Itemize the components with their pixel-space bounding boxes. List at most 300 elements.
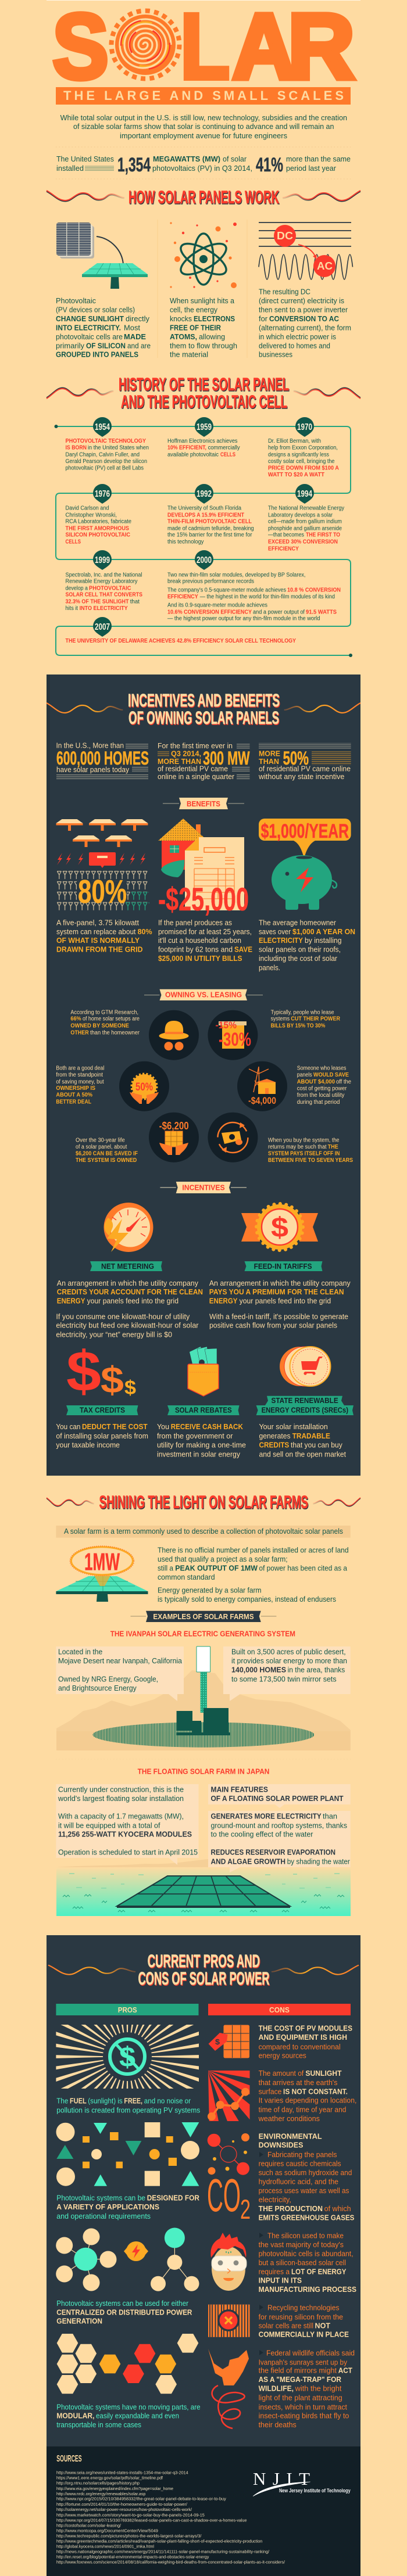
label: SRECs — [256, 1396, 354, 1415]
icon: tax credits dollars: $ — [124, 1377, 136, 1399]
callout: Ivanpah location: Located in the — [58, 1647, 102, 1656]
text: DC to AC: The resulting DC — [259, 287, 310, 296]
icon: CO2 molecule: 2 — [240, 2194, 251, 2225]
text: silicon energy input: the vast majority of today's — [259, 2240, 344, 2249]
text: environmental downsides: electricity, — [259, 2195, 291, 2204]
text: sunlight knocks electrons: allowing — [199, 332, 225, 341]
text: modular: transportable in some cases — [56, 2420, 141, 2429]
intro text: of sizable solar farms show that solar is continuing to advance and will remain an — [73, 122, 334, 131]
year pins: 1970 — [297, 422, 312, 432]
text: solar rebates: from the government or — [157, 1431, 233, 1440]
logo: NJIT — [253, 2469, 351, 2496]
text: benefit $1,000 a year — [259, 918, 355, 972]
timeline — [55, 417, 352, 657]
text: 1MW standard: common standard — [158, 1573, 215, 1581]
text: benefit $25,000: footprint by 62 tons and — [158, 945, 233, 953]
text: SRECs: TRADABLE — [292, 1431, 330, 1440]
text: DC to AC: in which electric power is — [259, 332, 336, 341]
heading: history: HISTORY OF THE SOLAR PANEL — [119, 374, 289, 394]
stat: more than 50%: without any state incentive — [258, 772, 344, 781]
stat: 300 MW: Q3 2014, — [171, 749, 201, 758]
callout: floating farm details — [56, 1784, 199, 1865]
text: benefit $25,000: If the panel produces as — [158, 918, 232, 927]
text: photovoltaic cells: directly — [126, 314, 150, 323]
text: 1MW standard: still a — [158, 1563, 174, 1572]
text: ownership 50% better: OWNERSHIP IS — [56, 1085, 95, 1092]
entry 1976 — [65, 505, 132, 546]
text: mega-trap: ACT — [338, 2366, 352, 2375]
entry 1970: PRICE DOWN FROM $100 A — [268, 465, 339, 472]
text: 66% owned by someone other: of home solar setups are — [83, 1016, 140, 1022]
text: feed-in tariffs: ENERGY — [209, 1296, 238, 1305]
source list: http://www.nrdc.org/energy/renewables/solar.asp — [56, 2491, 145, 2496]
year pins: 2000 — [197, 555, 212, 565]
callout: main features — [208, 1784, 351, 1808]
entry 1954: IS BORN — [65, 445, 87, 451]
entry 1999: PHOTOVOLTAIC — [89, 585, 131, 591]
text: photovoltaic cells: (PV devices or solar cells) — [56, 305, 135, 314]
text: net metering: An arrangement in which the utility company — [57, 1279, 199, 1287]
text: free fuel: The — [56, 2097, 68, 2105]
icon: tax credits dollars — [66, 1339, 136, 1403]
text: DC to AC — [259, 287, 351, 359]
callout: floating plant benefits — [208, 1811, 351, 1872]
text: benefit $1,000 a year: by installing — [305, 936, 342, 945]
label: net metering — [90, 1261, 162, 1271]
entry 1994: The National Renewable Energy — [268, 505, 344, 512]
stat: US solar installed: period last year — [286, 164, 337, 173]
entry 1999: Renewable Energy Laboratory — [65, 579, 138, 585]
icon: house and utility bill — [158, 819, 249, 917]
heading: Ivanpah: THE IVANPAH SOLAR ELECTRIC GENERATING SYSTEM — [110, 1630, 295, 1638]
text: recycling: solar cells are still — [259, 2321, 313, 2330]
heading: how solar panels work — [47, 186, 360, 207]
text: ownership 50% better: of saving money, but — [56, 1079, 104, 1085]
text: benefit $25,000: it'll cut a household carbon — [158, 936, 241, 945]
heading: floating solar farm: THE FLOATING SOLAR FARM IN JAPAN — [138, 1767, 269, 1775]
source list: http://www.greentechmedia.com/articles/read/ivanpah-solar-plant-falling-short-of-expected-electricity-production — [56, 2538, 262, 2543]
ribbon: owning vs leasing — [144, 989, 263, 1000]
source list: http://www.marketwatch.com/story/want-to-go-solar-buy-the-panels-2014-09-15 — [56, 2512, 205, 2517]
stat: US solar installed: MEGAWATTS (MW) — [153, 155, 220, 163]
text: solar rebates: RECEIVE CASH BACK — [171, 1422, 244, 1431]
source list: http://costofsolar.com/solar-leasing/ — [56, 2523, 122, 2528]
entry 1992: DEVELOPS A 15.9% EFFICIENT — [167, 512, 244, 518]
entry 1994: phosphide and gallium arsenide — [268, 525, 342, 532]
band: solar farm definition: A solar farm is a term commonly used to describe a collection of photovoltaic solar panels — [64, 1527, 343, 1535]
icon: panel with price tag — [208, 2025, 249, 2058]
intro text: important employment avenue for future engineers — [120, 131, 287, 140]
text: 66% owned by someone other: OWNED BY SOMEONE — [70, 1022, 129, 1029]
text: silicon energy input: but a silicon-based solar cell — [259, 2258, 346, 2267]
text: feed-in tariffs — [209, 1279, 351, 1330]
text: sunlight knocks electrons: them to flow through — [170, 342, 237, 350]
icon: solar cells to panel — [56, 223, 148, 289]
text: benefit 80% — [56, 918, 152, 953]
text: system pays itself off: BETWEEN FIVE TO SEVEN YEARS — [268, 1157, 353, 1164]
illustration: Ivanpah tower and mirror field — [56, 1646, 351, 1750]
text: mega-trap: Ivanpah's sunrays sent up by — [259, 2358, 348, 2367]
text: variety of applications: A VARIETY OF APPLICATIONS — [56, 2202, 159, 2211]
text: silicon energy input: The silicon used to make — [267, 2231, 344, 2240]
text: feed-in tariffs: positive cash flow from your solar panels — [209, 1321, 337, 1330]
text: net metering: electricity but feed one kilowatt-hour of solar — [56, 1321, 199, 1330]
heading: incentives and benefits: INCENTIVES AND BENEFITS — [128, 690, 280, 711]
text: environmental downsides: Fabricating the panels — [267, 2150, 337, 2159]
entry 2007: THE UNIVERSITY OF DELAWARE ACHIEVES 42.8% EFFICIENCY SOLAR CELL TECHNOLOGY — [65, 638, 296, 644]
text: DC to AC: businesses — [259, 350, 292, 359]
year pins: 1976 — [95, 489, 110, 499]
text: modular — [56, 2402, 201, 2429]
entry 1994: Laboratory develops a solar — [268, 512, 333, 518]
text: feed-in tariffs: PAYS YOU A PREMIUM FOR THE CLEAN — [209, 1287, 344, 1296]
text: system pays itself off: SYSTEM PAYS ITSELF OFF IN — [268, 1150, 340, 1157]
icon: receipt: -30% — [219, 1029, 251, 1050]
text: net metering — [56, 1279, 203, 1339]
text: modular: Photovoltaic systems have no moving parts, are — [56, 2402, 201, 2411]
year pins: 1959 — [197, 422, 212, 432]
text: leasing cuts power bills — [271, 1010, 340, 1029]
text: environmental downsides: THE PRODUCTION — [259, 2204, 323, 2213]
band: solar farm definition — [56, 1526, 351, 1538]
heading: history — [47, 374, 360, 412]
label: tax credits — [66, 1405, 138, 1415]
label: feed-in tariffs: FEED-IN TARIFFS — [254, 1262, 312, 1271]
icon: DC to AC conversion: AC — [317, 260, 333, 272]
text: net metering: If you consume one kilowatt-hour of utility — [56, 1312, 190, 1321]
text: mega-trap: their deaths — [259, 2420, 297, 2429]
text: photovoltaic cells: OF SILICON — [86, 342, 126, 350]
label: SRECs: STATE RENEWABLE — [271, 1396, 338, 1405]
stat: US solar installed: 1,354 — [117, 154, 151, 176]
text: leasing saves $4,000: ABOUT $4,000 — [297, 1079, 335, 1085]
icon: free sunlight burst: $ — [119, 2042, 135, 2073]
text: benefit 80%: DRAWN FROM THE GRID — [56, 945, 143, 953]
text: 66% owned by someone other — [70, 1010, 140, 1036]
text: feed-in tariffs: your panels feed into the grid — [240, 1296, 331, 1305]
entry 2000: — the highest in the world for thin-film modules of its kind — [200, 594, 335, 600]
text: benefit $1,000 a year: solar panels on their roofs, — [259, 945, 341, 953]
text: environmental downsides: process uses water as well as — [259, 2186, 349, 2195]
entry 1976: THE FIRST AMORPHOUS — [65, 525, 129, 532]
text: feed-in tariffs: An arrangement in which the utility company — [209, 1279, 351, 1287]
stat: 300 MW: 300 MW — [203, 748, 250, 769]
text: cost of modules: THE COST OF PV MODULES — [259, 2024, 352, 2032]
text: photovoltaic cells: Most — [124, 323, 140, 332]
text: cost of modules: energy sources — [259, 2051, 306, 2060]
text: DC to AC: for — [259, 314, 268, 323]
source list: http://global.kyocera.com/news/2014/0901_imka.html — [56, 2543, 154, 2549]
text: photovoltaic cells: and are — [127, 342, 151, 350]
icon: centralized and distributed networks — [56, 2227, 199, 2291]
text: DC to AC: (alternating current), the form — [259, 323, 351, 332]
callout: Ivanpah size: to some 173,500 twin mirror sets — [231, 1674, 337, 1683]
text: recycling: for reusing silicon from the — [259, 2312, 343, 2321]
text: photovoltaic cells: GROUPED INTO PANELS — [56, 350, 138, 359]
callout: Ivanpah size: Built on 3,500 acres of public desert, — [231, 1647, 346, 1656]
entry 1954 — [65, 438, 149, 472]
entry 2000: And its 0.9-square-meter module achieves — [167, 602, 267, 609]
text: centralized or distributed: Photovoltaic systems can be used for either — [56, 2299, 189, 2308]
entry 1994: —that becomes — [268, 532, 304, 539]
entry 1999: 32.3% OF THE SUNLIGHT — [65, 598, 129, 605]
text: variety of applications: DESIGNED FOR — [147, 2193, 199, 2202]
entry 1994: cell—made from gallium indium — [268, 519, 342, 525]
text: system pays itself off: When you buy the system, the — [268, 1137, 340, 1143]
text: environmental downsides: hydrofluoric acid, and the — [259, 2177, 338, 2186]
text: free fuel: FUEL — [70, 2097, 87, 2105]
text: mega-trap: Federal wildlife officials said — [266, 2348, 355, 2357]
text: DC to AC: then sent to a power inverter — [259, 305, 348, 314]
text: benefit $1,000 a year: ELECTRICITY — [259, 936, 303, 945]
stat: US solar installed: installed — [56, 164, 84, 173]
text: mega-trap: the field of mirrors might — [259, 2366, 337, 2375]
text: net metering: ENERGY — [57, 1296, 85, 1305]
entry 1976: Christopher Wronski, — [65, 512, 117, 518]
entry 2000: 10.6% CONVERSION EFFICIENCY — [167, 609, 252, 615]
stat: 300 MW: MORE THAN — [158, 757, 201, 766]
entry 1970: Dr. Elliot Berman, with — [268, 438, 321, 444]
entry 2000: 10.8 % CONVERSION — [287, 587, 341, 593]
text: benefit $1,000 a year: $1,000 A YEAR ON — [292, 927, 355, 936]
text: mega-trap: light of the plant attracting — [259, 2394, 342, 2402]
entry 1999: Spectrolab, Inc. and the National — [65, 572, 142, 578]
text: variety of applications: and operational requirements — [56, 2212, 151, 2220]
entry 2000: The company's 0.5-square-meter module achieves — [167, 587, 286, 593]
stat: more than 50%: 50% — [283, 748, 309, 769]
text: centralized or distributed: CENTRALIZED OR DISTRIBUTED POWER — [56, 2308, 192, 2316]
stat: 600,000 homes — [56, 741, 149, 780]
text: DC to AC: delivered to homes and — [259, 342, 330, 350]
stat: more than 50%: MORE — [259, 749, 280, 758]
entry 1959 — [167, 438, 240, 458]
icon: receipt — [208, 1010, 258, 1060]
callout: floating plant benefits: ground-mount and rooftop systems, thanks — [210, 1821, 347, 1829]
text: benefit 80%: 80% — [138, 927, 152, 936]
text: benefit $25,000 — [158, 918, 252, 963]
icon: modular hexagons — [57, 2334, 198, 2394]
callout: Ivanpah size — [223, 1646, 351, 1701]
text: 1MW standard: There is no official number of panels installed or acres of land — [158, 1545, 349, 1554]
text: mega-trap: insects, which in turn attract — [259, 2402, 347, 2411]
text: SRECs: generates — [259, 1431, 291, 1440]
source list: http://news.nationalgeographic.com/news/energy/2014/11/141111-solar-panel-manufacturing-sustainability-ranking/ — [56, 2549, 270, 2554]
icon: receipt: -15% — [215, 1020, 237, 1031]
text: sunlight not constant: that arrives at the earth's — [259, 2078, 337, 2087]
entry 1970 — [268, 438, 339, 478]
text: free fuel: and no noise or — [144, 2097, 191, 2105]
entry 1994: THE FIRST TO — [306, 532, 340, 539]
entry 1954: Daryl Chapin, Calvin Fuller, and — [65, 452, 140, 458]
text: 1MW standard — [158, 1545, 349, 1603]
text: photovoltaic cells: primarily — [56, 342, 85, 350]
entry 1999: hits it — [65, 605, 78, 612]
callout: main features: MAIN FEATURES — [210, 1785, 268, 1793]
panel: incentives and benefits — [47, 675, 360, 1476]
text: environmental downsides: ENVIRONMENTAL — [259, 2132, 322, 2141]
text: environmental downsides: of which — [324, 2204, 351, 2213]
text: sunlight not constant: It varies depending on location, — [259, 2096, 356, 2105]
text: ownership 50% better: Both are a good deal — [56, 1065, 104, 1071]
stat: 600,000 homes: In the U.S., More than — [56, 741, 124, 750]
heading: pros and cons — [48, 1950, 359, 1989]
label: solar rebates: SOLAR REBATES — [175, 1406, 232, 1414]
text: tax credits: of installing solar panels from — [56, 1431, 148, 1440]
text: mega-trap: AS A "MEGA-TRAP" FOR — [259, 2375, 341, 2384]
text: sunlight knocks electrons: cell, the energy — [170, 305, 218, 314]
text: 66% owned by someone other: 66% — [70, 1016, 81, 1022]
logo: NJIT: NJIT — [253, 2469, 310, 2489]
text: silicon energy input: photovoltaic cells is abundant, — [259, 2249, 354, 2258]
entry 2000 — [167, 572, 341, 622]
ribbon: incentives: INCENTIVES — [182, 1183, 225, 1192]
source list: http://solarenergy.net/solar-power-resources/how-photovoltaic-cells-work/ — [56, 2507, 192, 2512]
text: free fuel: (sunlight) is — [88, 2097, 123, 2105]
icon: free sunlight burst — [56, 2025, 199, 2089]
text: recycling — [259, 2304, 349, 2338]
text: sunlight knocks electrons: the material — [170, 350, 208, 359]
text: 66% owned by someone other: According to GTM Research, — [70, 1010, 138, 1016]
heading: incentives and benefits — [47, 690, 360, 728]
text: mega-trap — [259, 2348, 355, 2429]
text: 1MW standard: is typically sold to energy companies, instead of endusers — [158, 1595, 336, 1603]
callout: floating plant benefits: REDUCES RESERVOIR EVAPORATION — [210, 1848, 335, 1857]
entry 1976: SILICON PHOTOVOLTAIC — [65, 532, 130, 539]
source list: http://www.seia.org/news/united-states-installs-1354-mw-solar-q3-2014 — [56, 2470, 188, 2475]
icon: money cycle arrows — [208, 1113, 258, 1163]
callout: Ivanpah size: 140,000 HOMES — [231, 1666, 286, 1674]
text: sunlight knocks electrons: ELECTRONS — [194, 314, 235, 323]
text: environmental downsides: DOWNSIDES — [259, 2141, 304, 2150]
text: environmental downsides: EMITS GREENHOUSE GASES — [259, 2213, 355, 2222]
entry 1999: INTO ELECTRICITY — [80, 605, 128, 612]
entry 1959: 10% EFFICIENT, — [167, 445, 206, 451]
text: photovoltaic cells: INTO ELECTRICITY. — [56, 323, 121, 332]
text: sunlight not constant: The amount of — [259, 2069, 304, 2078]
text: sunlight not constant: weather conditions — [258, 2114, 320, 2123]
label: net metering: NET METERING — [101, 1262, 154, 1271]
entry 1954: photovoltaic (PV) cell at Bell Labs — [65, 465, 144, 472]
text: SRECs — [259, 1422, 346, 1458]
bar: cons — [208, 2004, 351, 2015]
entry 1959: commercially — [208, 445, 240, 451]
callout: floating plant benefits: by shading the water — [287, 1857, 350, 1865]
text: mega-trap: WILDLIFE, — [259, 2384, 294, 2393]
text: benefit $1,000 a year: panels. — [259, 963, 280, 972]
entry 1994: EXCEED 30% CONVERSION — [268, 539, 338, 546]
text: ownership 50% better: from the standpoint — [56, 1072, 103, 1078]
text: $6,200 saved: $6,200 CAN BE SAVED IF — [76, 1150, 138, 1157]
text: DC to AC: (direct current) electricity is — [259, 296, 344, 305]
entry 1959: Hoffman Electronics achieves — [167, 438, 238, 444]
heading: pros and cons: CONS OF SOLAR POWER — [138, 1968, 270, 1989]
intro text: While total solar output in the U.S. is still low, new technology, subsidies and the creation — [60, 113, 347, 122]
stat: 300 MW — [158, 741, 250, 781]
icon: utility tower and house — [237, 1061, 287, 1111]
icon: $1,000 per year piggy bank: $1,000/YEAR — [261, 820, 349, 842]
source list: http://fortune.com/2014/01/10/the-homeowners-guide-to-solar-power/ — [56, 2502, 188, 2507]
source list — [56, 2470, 285, 2565]
text: variety of applications — [56, 2193, 199, 2220]
text: solar rebates: investment in solar energy — [157, 1450, 241, 1458]
icon: atom — [170, 222, 237, 288]
year pins: 1992 — [197, 489, 212, 499]
year pins: 1999 — [95, 555, 110, 565]
entry 1954: Gerald Pearson develop the silicon — [65, 458, 147, 465]
ribbon: benefits — [163, 798, 244, 809]
text: sunlight knocks electrons: When sunlight hits a — [170, 296, 235, 305]
text: silicon energy input: requires a — [259, 2268, 290, 2276]
source list: http://www.npr.org/2014/07/15/330769382/leased-solar-panels-can-cast-a-shadow-over-a-homes-value — [56, 2517, 247, 2523]
entry 2000: EFFICIENCY — [167, 594, 198, 600]
source list: http://www.npr.org/2015/02/10/384958332/the-great-solar-panel-debate-to-lease-or-to-buy — [56, 2496, 226, 2502]
heading: incentives and benefits: OF OWNING SOLAR PANELS — [128, 707, 279, 728]
text: SRECs: that you can buy — [291, 1441, 342, 1450]
heading: how solar panels work: HOW SOLAR PANELS WORK — [128, 186, 279, 207]
text: 1MW standard: used that qualify a project as a solar farm; — [158, 1555, 288, 1563]
text: leasing saves $4,000 — [297, 1065, 352, 1106]
text: silicon energy input: MANUFACTURING PROCESS — [259, 2285, 356, 2294]
entry 2000: 91.5 WATTS — [306, 609, 337, 615]
text: solar rebates: utility for making a one-time — [157, 1441, 246, 1450]
stat: US solar installed: The United States — [56, 155, 114, 163]
text: tax credits: You can — [56, 1422, 80, 1431]
callout: floating farm details: 11,256 255-WATT KYOCERA MODULES — [58, 1830, 192, 1839]
icon: tax credits dollars: $ — [101, 1359, 124, 1401]
subtitle banner: THE LARGE AND SMALL SCALES — [63, 88, 344, 103]
text: 1MW standard: Energy generated by a solar farm — [158, 1585, 262, 1594]
text: mega-trap: with the bright — [295, 2384, 342, 2393]
callout: floating plant benefits: AND ALGAE GROWTH — [210, 1857, 285, 1865]
text: centralized or distributed: GENERATION — [56, 2316, 102, 2325]
stat: US solar installed: photovoltaics (PV) in Q3 2014, — [152, 164, 252, 173]
entry 2000: break previous performance records — [167, 579, 254, 585]
text: benefit $1,000 a year: including the cost of solar — [259, 954, 338, 963]
text: sunlight knocks electrons: FREE OF THEIR — [170, 323, 221, 332]
callout: Ivanpah location — [56, 1646, 184, 1701]
text: feed-in tariffs: With a feed-in tariff, it's possible to generate — [209, 1312, 348, 1321]
text: sunlight not constant — [258, 2069, 356, 2123]
stat: 300 MW: online in a single quarter — [158, 772, 235, 781]
text: tax credits: your taxable income — [56, 1441, 120, 1450]
text: system pays itself off: THE — [328, 1144, 338, 1150]
text: sunlight knocks electrons — [170, 296, 237, 359]
icon: panels powering battery with 80%: 80% — [78, 873, 127, 910]
year pins — [93, 417, 314, 637]
callout: Ivanpah location: Owned by NRG Energy, Google, — [58, 1674, 158, 1683]
source list: http://en.reset.org/blog/potential-environmental-impacts-and-obstacles-solar-energy — [56, 2554, 209, 2559]
text: $6,200 saved: THE SYSTEM IS OWNED — [76, 1157, 137, 1164]
ribbon: examples of solar farms: EXAMPLES OF SOLAR FARMS — [153, 1612, 254, 1621]
text: leasing saves $4,000: Someone who leases — [297, 1065, 347, 1071]
text: cost of modules: AND EQUIPMENT IS HIGH — [259, 2033, 347, 2042]
text: benefit $1,000 a year: The average homeowner — [259, 918, 337, 927]
icon: varied shapes — [56, 2122, 199, 2186]
text: free fuel: FREE, — [124, 2097, 142, 2105]
ribbon: examples of solar farms — [130, 1611, 276, 1622]
entry 1992: made of cadmium telluride, breaking — [167, 525, 254, 532]
source list: http://org.ntnu.no/solarcells/pages/history.php — [56, 2481, 140, 2486]
text: $6,200 saved: Over the 30-year life — [76, 1137, 125, 1143]
entry 1992: The University of South Florida — [167, 505, 242, 512]
callout: Ivanpah location: and Brightsource Energy — [58, 1684, 137, 1692]
text: sunlight knocks electrons: ATOMS, — [170, 332, 197, 341]
text: 66% owned by someone other: than the homeowner — [90, 1030, 140, 1036]
icon: net metering gauge — [103, 1203, 153, 1252]
text: system pays itself off — [268, 1137, 353, 1164]
entry 2000: Two new thin-film solar modules, developed by BP Solarex, — [167, 572, 305, 578]
text: DC to AC: CONVERSION TO AC — [269, 314, 339, 323]
